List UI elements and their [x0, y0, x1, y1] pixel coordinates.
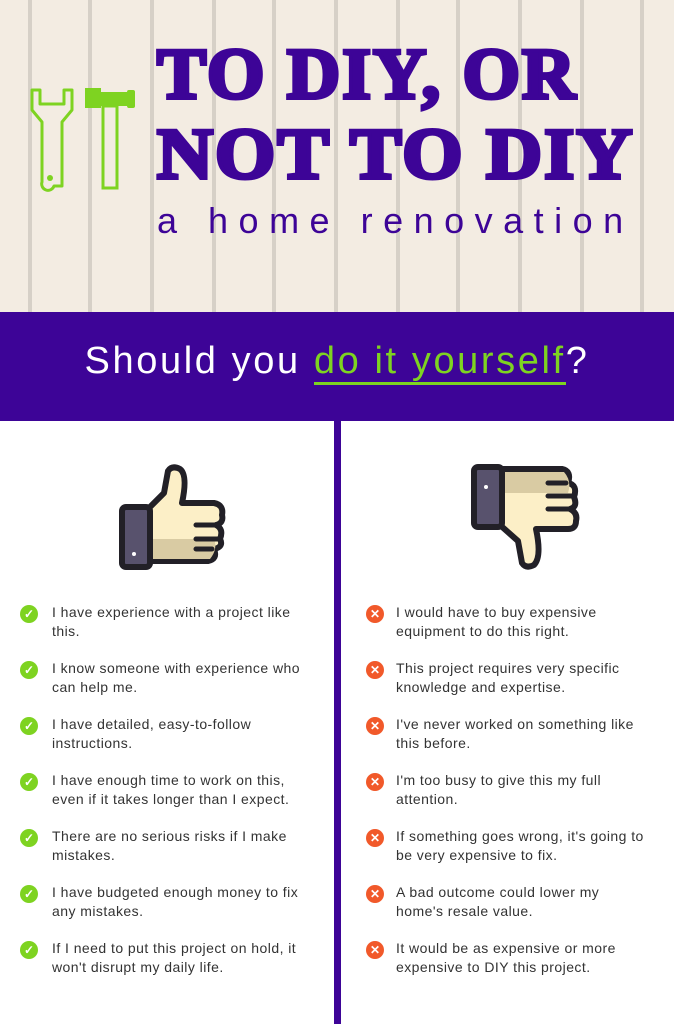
- title: NOT TO DIY: [157, 114, 634, 194]
- con item 1: I would have to buy expensive equipment to do this right.: [396, 604, 597, 639]
- icon: wrench and hammer: [30, 88, 135, 192]
- pro item 6: ✓: [24, 887, 34, 901]
- pro item 3: I have detailed, easy-to-follow instructions.: [52, 716, 251, 751]
- pro item 5: ✓: [24, 831, 34, 845]
- pro item 4: I have enough time to work on this, even if it takes longer than I expect.: [52, 772, 289, 807]
- con item 2: ✕: [370, 663, 380, 677]
- con item 6: ✕: [370, 887, 380, 901]
- pro item 3: ✓: [24, 719, 34, 733]
- con item 3: ✕: [370, 719, 380, 733]
- banner: question: [0, 312, 674, 421]
- con item 4: I'm too busy to give this my full attention.: [396, 772, 601, 807]
- pro item 1: ✓: [24, 607, 34, 621]
- text: Should you do it yourself?: [85, 340, 589, 382]
- con item 4: ✕: [370, 775, 380, 789]
- title: [156, 34, 634, 194]
- con item 3: I've never worked on something like this before.: [396, 716, 634, 751]
- title: TO DIY, OR: [157, 34, 577, 114]
- pro item 6: I have budgeted enough money to fix any mistakes.: [52, 884, 298, 919]
- con item 7: ✕: [370, 943, 380, 957]
- list: pros: [20, 604, 300, 975]
- subtitle: a home renovation: [157, 200, 634, 241]
- con item 7: It would be as expensive or more expensive to DIY this project.: [396, 940, 616, 975]
- con item 6: A bad outcome could lower my home's resale value.: [396, 884, 599, 919]
- header: wood background: [0, 0, 674, 312]
- con item 1: ✕: [370, 607, 380, 621]
- icon: thumbs up: [119, 464, 226, 570]
- icon: thumbs down: [471, 464, 580, 570]
- con item 5: If something goes wrong, it's going to be very expensive to fix.: [396, 828, 644, 863]
- con item 2: This project requires very specific knowledge and expertise.: [396, 660, 620, 695]
- pro item 5: There are no serious risks if I make mistakes.: [52, 828, 287, 863]
- list: cons: [366, 604, 644, 975]
- pro item 2: ✓: [24, 663, 34, 677]
- divider: [334, 421, 341, 1024]
- pro item 7: If I need to put this project on hold, it won't disrupt my daily life.: [52, 940, 296, 975]
- pro item 2: I know someone with experience who can help me.: [52, 660, 300, 695]
- pro item 1: I have experience with a project like this.: [52, 604, 290, 639]
- con item 5: ✕: [370, 831, 380, 845]
- pro item 7: ✓: [24, 943, 34, 957]
- pro item 4: ✓: [24, 775, 34, 789]
